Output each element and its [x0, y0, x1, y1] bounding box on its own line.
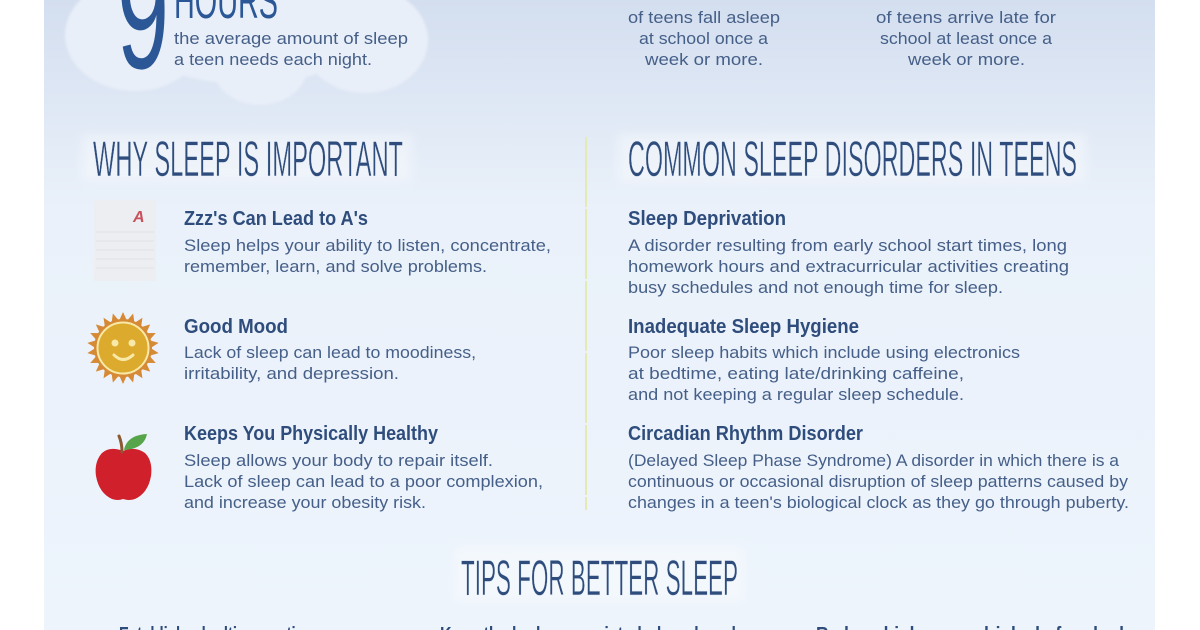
- item: zzz's can lead to a's: Zzz's Can Lead to A's: [184, 208, 368, 230]
- tips row, cropped at the page edge: [119, 624, 1124, 630]
- icon: graded paper: A: [132, 209, 145, 226]
- item: zzz's can lead to a's: remember, learn, and solve problems.: [184, 257, 487, 276]
- item: sleep deprivation: [628, 208, 1069, 297]
- stat: teens arrive late: week or more.: [907, 50, 1025, 69]
- icon: smiling sun: [87, 312, 159, 384]
- item: good mood: Good Mood: [184, 316, 288, 338]
- cloud description: a teen needs each night.: [174, 50, 372, 69]
- icon: graded paper: [94, 200, 156, 281]
- stat: teens arrive late: school at least once a: [880, 29, 1053, 48]
- infographic canvas: WHY SLEEP IS IMPORTANT: [93, 131, 403, 187]
- item: circadian rhythm disorder: continuous or occasional disruption of sleep patterns caused by: [628, 472, 1129, 491]
- cloud description: the average amount of sleep: [174, 29, 408, 48]
- item: keeps you physically healthy: Lack of sleep can lead to a poor complexion,: [184, 472, 543, 491]
- item: inadequate sleep hygiene: and not keeping a regular sleep schedule.: [628, 385, 964, 404]
- stat: teens arrive late: of teens arrive late for: [876, 8, 1056, 27]
- item: sleep deprivation: Sleep Deprivation: [628, 208, 786, 230]
- infographic canvas: TIPS FOR BETTER SLEEP: [461, 550, 738, 606]
- item: circadian rhythm disorder: changes in a teen's biological clock as they go through puberty.: [628, 493, 1129, 512]
- item: keeps you physically healthy: Sleep allows your body to repair itself.: [184, 451, 493, 470]
- item: keeps you physically healthy: [184, 423, 543, 512]
- item: circadian rhythm disorder: [628, 423, 1129, 512]
- item: good mood: irritability, and depression.: [184, 364, 399, 383]
- cloud description: [174, 29, 408, 69]
- heading: why sleep is important: [82, 131, 412, 187]
- item: keeps you physically healthy: and increase your obesity risk.: [184, 493, 426, 512]
- heading: tips for better sleep: [454, 547, 744, 606]
- stat: teens arrive late: [876, 8, 1056, 69]
- stat: teens fall asleep at school: at school once a: [639, 29, 769, 48]
- item: inadequate sleep hygiene: at bedtime, eating late/drinking caffeine,: [628, 364, 964, 383]
- item: good mood: Lack of sleep can lead to moodiness,: [184, 343, 476, 362]
- icon: red apple: [96, 434, 151, 500]
- item: zzz's can lead to a's: [184, 208, 551, 276]
- cloud callout: 9 hours of sleep: [65, 0, 428, 105]
- item: inadequate sleep hygiene: Poor sleep habits which include using electronics: [628, 343, 1020, 362]
- item: good mood: [184, 316, 476, 383]
- item: sleep deprivation: A disorder resulting from early school start times, long: [628, 236, 1067, 255]
- item: keeps you physically healthy: Keeps You Physically Healthy: [184, 423, 439, 445]
- item: inadequate sleep hygiene: Inadequate Sleep Hygiene: [628, 316, 859, 338]
- item: inadequate sleep hygiene: [628, 316, 1020, 404]
- item: zzz's can lead to a's: Sleep helps your ability to listen, concentrate,: [184, 236, 551, 255]
- stat: teens fall asleep at school: [628, 8, 780, 69]
- item: circadian rhythm disorder: Circadian Rhythm Disorder: [628, 423, 863, 445]
- item: sleep deprivation: busy schedules and not enough time for sleep.: [628, 278, 1003, 297]
- stat: teens fall asleep at school: of teens fall asleep: [628, 8, 780, 27]
- item: circadian rhythm disorder: (Delayed Sleep Phase Syndrome) A disorder in which there is a: [628, 451, 1120, 470]
- stat: teens fall asleep at school: week or more.: [644, 50, 763, 69]
- item: sleep deprivation: homework hours and extracurricular activities creating: [628, 257, 1069, 276]
- cloud shape: [65, 0, 428, 105]
